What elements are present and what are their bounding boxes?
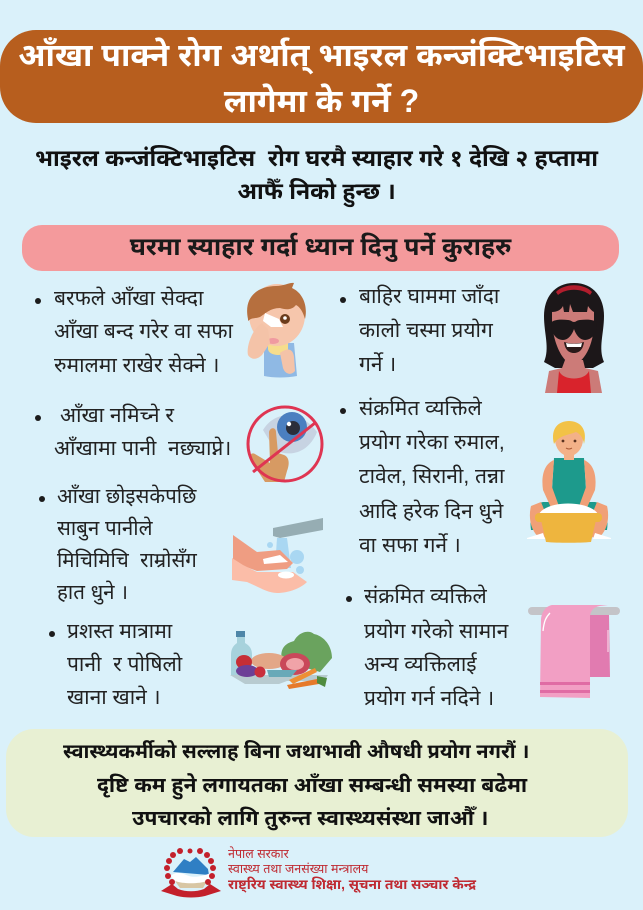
intro text: भाइरल कन्जंक्टिभाइटिस रोग घरमै स्याहार गरे १ देखि २ हप्तामा	[35, 145, 598, 171]
title text: आँखा पाक्ने रोग अर्थात् भाइरल कन्जंक्टिभाइटिस	[18, 37, 625, 73]
tip: ice pack: आँखा बन्द गरेर वा सफा	[54, 320, 233, 343]
tip: wash hands: मिचिमिचि राम्रोसँग	[57, 549, 197, 572]
section heading: घरमा स्याहार गर्दा ध्यान दिनु पर्ने कुराहरु	[130, 233, 511, 261]
tip: wash linens daily: टावेल, सिरानी, तन्ना	[359, 465, 504, 488]
footer organisation text: राष्ट्रिय स्वास्थ्य शिक्षा, सूचना तथा सञ्चार केन्द्र	[228, 877, 476, 892]
tip: water and nutritious food: पानी र पोषिलो	[67, 653, 182, 676]
intro text	[35, 144, 598, 208]
icon: washing hands under tap	[232, 518, 323, 593]
advice text: दृष्टि कम हुने लगायतका आँखा सम्बन्धी समस्या बढेमा	[97, 774, 527, 797]
tip: wash linens daily: संक्रमित व्यक्तिले	[359, 397, 482, 420]
section heading	[22, 225, 619, 271]
tip: water and nutritious food	[49, 620, 182, 709]
tip: sunglasses: बाहिर घाममा जाँदा	[359, 285, 499, 308]
tip: wash hands: हात धुने ।	[57, 581, 128, 604]
advice panel	[6, 729, 628, 837]
tip: wash hands: साबुन पानीले	[57, 517, 152, 540]
tip: do not share items: प्रयोग गर्न नदिने ।	[364, 687, 494, 710]
footer organisation text	[228, 846, 476, 893]
tip: sunglasses: कालो चस्मा प्रयोग	[359, 319, 493, 342]
advice text: स्वास्थ्यकर्मीको सल्लाह बिना जथाभावी औषधी प्रयोग नगरौं ।	[63, 741, 529, 763]
title text	[18, 37, 626, 119]
tip: wash linens daily	[340, 396, 505, 557]
tip: wash hands	[39, 484, 198, 604]
icon: food and water	[230, 631, 332, 689]
icon: girl with sunglasses	[544, 283, 604, 393]
icon: boy holding compress on eye	[247, 282, 306, 378]
emblem: Nepal government	[161, 848, 221, 898]
advice text: उपचारको लागि तुरुन्त स्वास्थ्यसंस्था जाऔँ ।	[132, 807, 488, 830]
tip: do not rub eyes	[35, 403, 231, 460]
icon: boy washing clothes	[527, 421, 611, 543]
tip: do not share items: संक्रमित व्यक्तिले	[364, 585, 487, 608]
icon: pink towel on rail	[528, 605, 620, 698]
footer organisation text: नेपाल सरकार	[228, 847, 289, 861]
tip: wash linens daily: प्रयोग गरेका रुमाल,	[359, 431, 505, 454]
advice text	[63, 740, 529, 830]
title text: लागेमा के गर्ने ?	[224, 83, 419, 119]
tip: wash linens daily: वा सफा गर्ने ।	[359, 534, 461, 557]
title banner	[0, 30, 643, 123]
tip: do not share items: अन्य व्यक्तिलाई	[364, 653, 477, 676]
tip: do not rub eyes: आँखामा पानी नछ्याप्ने।	[54, 437, 231, 460]
tip: ice pack: रुमालमा राखेर सेक्ने ।	[54, 354, 219, 377]
tip: sunglasses: गर्ने ।	[359, 353, 396, 376]
tip: water and nutritious food: प्रशस्त मात्रामा	[67, 620, 172, 643]
tip: sunglasses	[340, 284, 500, 376]
icon: no touching eye	[246, 406, 324, 482]
tip: do not share items	[346, 584, 509, 710]
footer organisation text: स्वास्थ्य तथा जनसंख्या मन्त्रालय	[228, 862, 368, 876]
tip: wash linens daily: आदि हरेक दिन धुने	[359, 500, 503, 523]
tip: ice pack: बरफले आँखा सेक्दा	[54, 287, 203, 310]
tip: water and nutritious food: खाना खाने ।	[67, 686, 161, 709]
tip: wash hands: आँखा छोइसकेपछि	[57, 485, 196, 508]
tip: do not rub eyes: आँखा नमिच्ने र	[60, 404, 174, 427]
tip: do not share items: प्रयोग गरेको सामान	[364, 620, 508, 643]
intro text: आफैँ निको हुन्छ ।	[237, 178, 396, 204]
tip: ice pack	[35, 286, 234, 377]
